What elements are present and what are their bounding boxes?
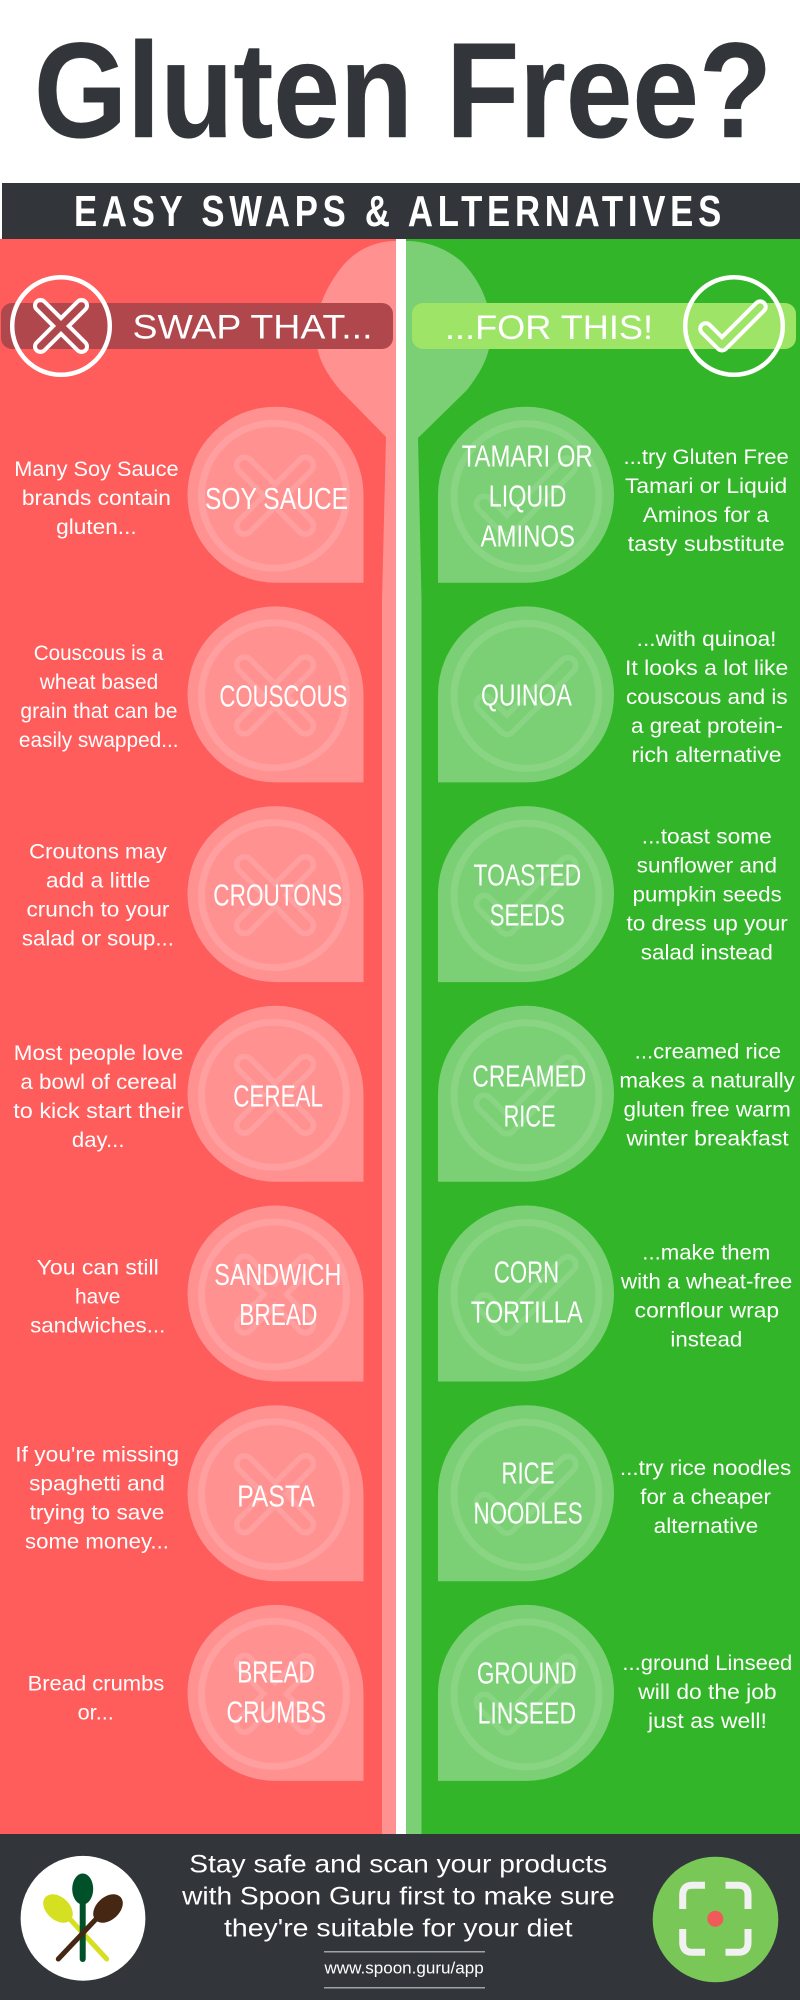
description: instead (670, 1327, 742, 1351)
description: winter breakfast (625, 1126, 789, 1150)
description (626, 824, 788, 964)
description: gluten... (56, 515, 137, 539)
badge: tick (438, 407, 614, 583)
description: have (75, 1284, 120, 1308)
description: sandwiches... (30, 1313, 165, 1337)
pill: swap that (1, 303, 393, 349)
row 3 left: croutons (22, 806, 364, 982)
panel: swap that (red) (0, 239, 396, 1834)
description: some money... (25, 1530, 169, 1554)
badge label: AMINOS (481, 520, 575, 554)
description: ...ground Linseed (622, 1651, 792, 1675)
description: couscous and is (626, 685, 788, 709)
badge label: LIQUID (489, 480, 566, 514)
spoon silhouette: green side (406, 241, 491, 1834)
icon: tick in circle (685, 277, 783, 375)
badge label: NOODLES (474, 1496, 583, 1530)
description (14, 457, 179, 539)
description (13, 1041, 184, 1152)
pill: for this (412, 303, 796, 349)
row 1 left: soy sauce (14, 407, 364, 583)
description: ...toast some (642, 824, 772, 848)
row 1 right: tamari or liquid aminos (438, 407, 789, 583)
description: grain that can be (20, 699, 178, 723)
footer message: Stay safe and scan your products (189, 1851, 607, 1879)
badge: tick (438, 1206, 614, 1382)
badge label: GROUND (477, 1656, 576, 1690)
description (620, 1456, 791, 1538)
description: or... (78, 1701, 114, 1725)
footer message: they're suitable for your diet (224, 1915, 573, 1943)
row 4 left: cereal (13, 1006, 364, 1182)
description: ...creamed rice (635, 1039, 781, 1063)
badge label: COUSCOUS (219, 680, 347, 714)
badge label: SEEDS (490, 899, 565, 933)
badge label: SOY SAUCE (205, 482, 348, 516)
badge: tick (438, 1006, 614, 1182)
description: just as well! (647, 1709, 767, 1733)
description: a bowl of cereal (20, 1070, 177, 1094)
row 3 right: toasted seeds (438, 806, 788, 982)
description (15, 1443, 179, 1554)
badge label: TOASTED (474, 859, 581, 893)
badge label: CROUTONS (213, 879, 342, 913)
description (622, 1651, 792, 1733)
row 5 left: sandwich bread (30, 1206, 363, 1382)
description (19, 641, 179, 752)
description: brands contain (22, 486, 171, 510)
badge label (474, 859, 581, 933)
description: to dress up your (626, 911, 788, 935)
row 4 right: creamed rice (438, 1006, 795, 1182)
badge label (477, 1656, 576, 1730)
badge: cross (188, 806, 364, 982)
description: ...with quinoa! (637, 627, 776, 651)
description: ...try rice noodles (620, 1456, 791, 1480)
description: ...try Gluten Free (624, 445, 789, 469)
description: cornflour wrap (635, 1298, 779, 1322)
description: for a cheaper (640, 1485, 771, 1509)
row 6 right: rice noodles (438, 1405, 791, 1581)
description: will do the job (637, 1680, 777, 1704)
badge: cross (188, 606, 364, 782)
badge: tick (438, 1405, 614, 1581)
description (624, 445, 789, 556)
badge label: LINSEED (478, 1696, 576, 1730)
row 6 left: pasta (15, 1405, 364, 1581)
description: salad or soup... (22, 926, 174, 950)
badge label: CEREAL (233, 1080, 323, 1114)
description: trying to save (30, 1501, 164, 1525)
icon: spoon guru logo (21, 1856, 145, 1981)
description: easily swapped... (19, 728, 179, 752)
header: swap that (1, 277, 393, 375)
description: gluten free warm (624, 1097, 791, 1121)
badge label (474, 1456, 583, 1530)
icon: cross in circle (12, 277, 110, 375)
description: day... (72, 1128, 124, 1152)
badge label: RICE (504, 1100, 556, 1134)
description: wheat based (39, 670, 158, 694)
badge label: RICE (502, 1456, 554, 1490)
row 2 right: quinoa (438, 606, 788, 782)
badge label (472, 1060, 586, 1134)
description: add a little (46, 868, 150, 892)
description (625, 627, 788, 767)
url with rules: www.spoon.guru/app (323, 1958, 484, 1977)
description: Couscous is a (34, 641, 163, 665)
description: with a wheat-free (620, 1269, 792, 1293)
description: to kick start their (13, 1099, 184, 1123)
description: a great protein- (631, 714, 783, 738)
badge: cross (188, 1405, 364, 1581)
description (619, 1039, 795, 1150)
description: Most people love (14, 1041, 183, 1065)
badge: cross (188, 1006, 364, 1182)
badge label: BREAD (237, 1655, 315, 1689)
icon: scan (653, 1857, 778, 1982)
description: Croutons may (29, 839, 167, 863)
row 5 right: corn tortilla (438, 1206, 792, 1382)
badge label (226, 1655, 326, 1729)
badge label (462, 440, 593, 554)
panel: for this (green) (406, 239, 800, 1834)
badge label: SANDWICH (214, 1258, 341, 1292)
description: You can still (37, 1255, 159, 1279)
footer message (181, 1851, 615, 1943)
description: ...make them (642, 1240, 770, 1264)
badge label: TAMARI OR (462, 440, 593, 474)
badge label: BREAD (239, 1298, 317, 1332)
spoon silhouette: red side (316, 241, 396, 1834)
label: for this: ...FOR THIS! (445, 309, 653, 347)
description: Many Soy Sauce (14, 457, 179, 481)
description: It looks a lot like (625, 656, 788, 680)
badge: cross (188, 1206, 364, 1382)
description: Tamari or Liquid (625, 474, 787, 498)
description: pumpkin seeds (633, 882, 782, 906)
description: makes a naturally (619, 1068, 795, 1092)
badge label: CREAMED (472, 1060, 586, 1094)
description: Aminos for a (643, 503, 769, 527)
description: spaghetti and (29, 1472, 165, 1496)
centre white divider (396, 239, 406, 1834)
badge label: PASTA (237, 1480, 315, 1514)
footer (0, 1834, 800, 2000)
badge label: QUINOA (481, 679, 572, 713)
footer message: with Spoon Guru first to make sure (181, 1883, 615, 1911)
description: rich alternative (632, 743, 782, 767)
row 2 left: couscous (19, 606, 364, 782)
description (30, 1255, 165, 1337)
description (22, 839, 174, 950)
description: tasty substitute (628, 532, 785, 556)
description: salad instead (641, 940, 773, 964)
badge label (471, 1256, 583, 1330)
badge label: CORN (494, 1256, 559, 1290)
description: sunflower and (637, 853, 777, 877)
header: for this (412, 277, 796, 375)
badge: cross (188, 1605, 364, 1781)
badge label (214, 1258, 341, 1332)
subtitle band (2, 183, 800, 239)
badge: cross (188, 407, 364, 583)
badge: tick (438, 606, 614, 782)
description (620, 1240, 792, 1351)
badge label: TORTILLA (471, 1296, 583, 1330)
badge label: CRUMBS (226, 1695, 326, 1729)
description: Bread crumbs (28, 1672, 164, 1696)
label: swap that: SWAP THAT... (132, 308, 372, 346)
description: crunch to your (26, 897, 169, 921)
row 7 right: ground linseed (438, 1605, 792, 1781)
badge: tick (438, 1605, 614, 1781)
badge: tick (438, 806, 614, 982)
row 7 left: bread crumbs (28, 1605, 363, 1781)
description (28, 1672, 164, 1725)
description: alternative (654, 1514, 758, 1538)
description: If you're missing (15, 1443, 179, 1467)
